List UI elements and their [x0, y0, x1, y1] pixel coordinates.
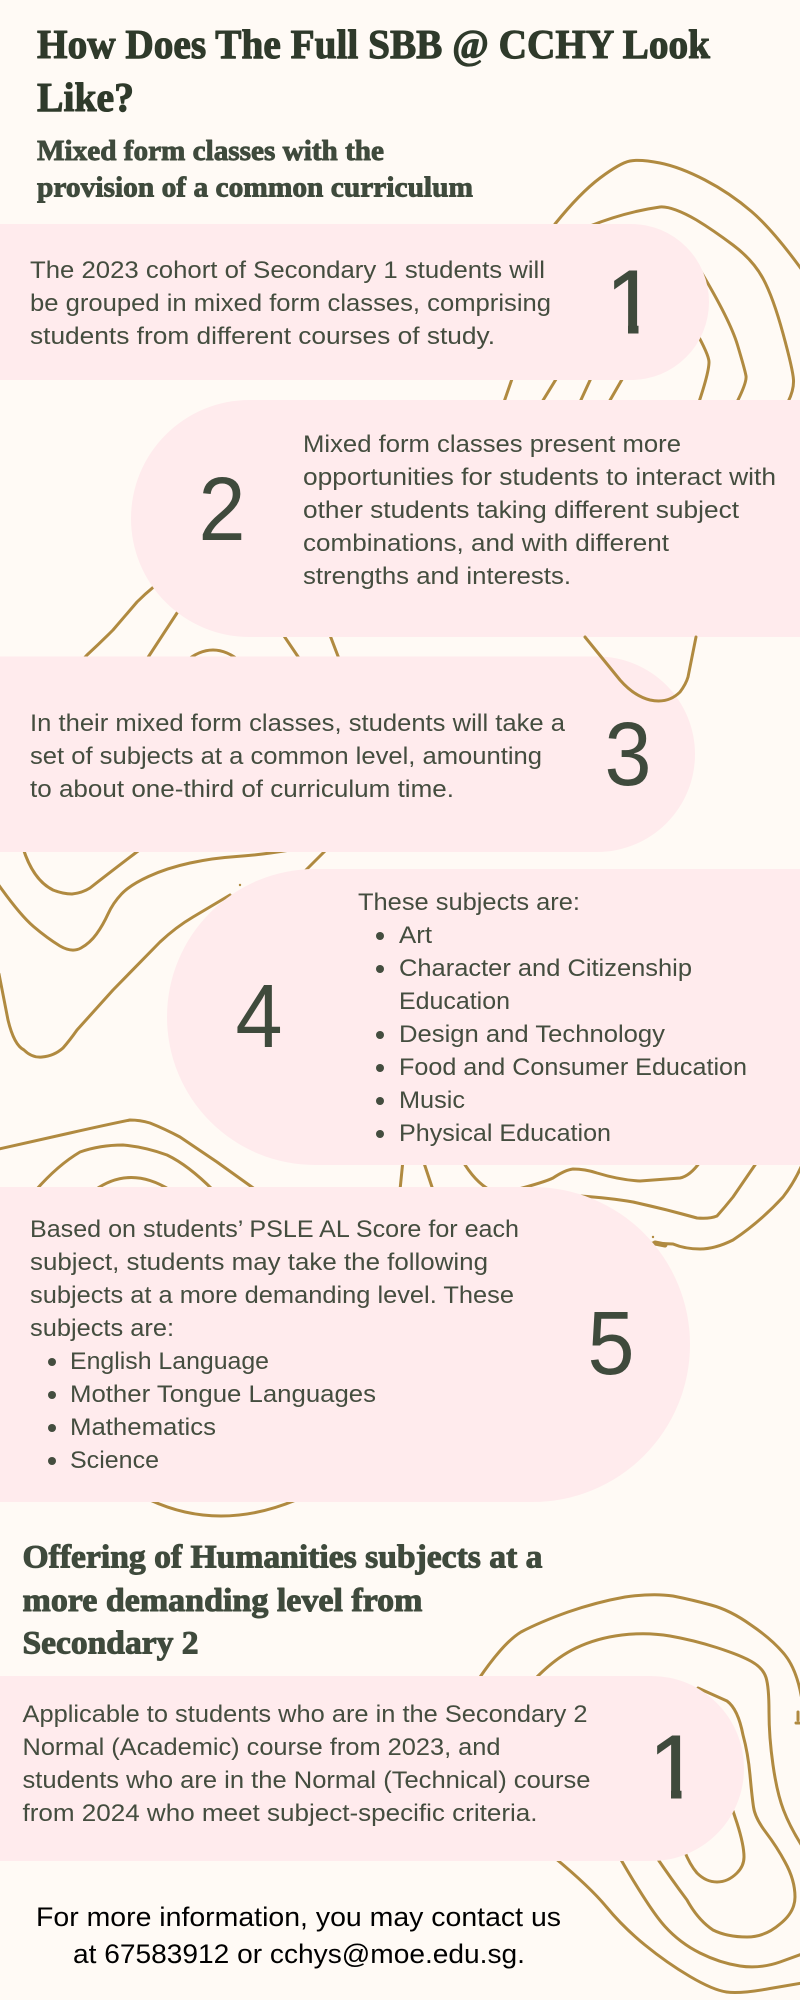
- contact information: [36, 1902, 561, 1969]
- text block 4: [358, 889, 747, 1147]
- contact information: at 67583912 or cchys@moe.edu.sg.: [73, 1939, 525, 1969]
- title: How Does The Full SBB @ CCHY Look: [37, 21, 710, 67]
- subtitle: [37, 135, 473, 204]
- contact information: For more information, you may contact us: [36, 1902, 561, 1932]
- text block 6: Normal (Academic) course from 2023, and: [22, 1734, 500, 1761]
- title: [37, 21, 710, 120]
- text block 6: [22, 1701, 590, 1827]
- text block 2: other students taking different subject: [303, 497, 739, 524]
- panel 2: opportunities to interact: [131, 400, 800, 637]
- heading: humanities subjects: Secondary 2: [22, 1626, 199, 1662]
- panel 6: humanities eligibility: [0, 1676, 744, 1861]
- number 3: 3: [604, 705, 652, 805]
- text block 5: subjects are:: [30, 1315, 174, 1342]
- number 5: 5: [588, 1294, 634, 1394]
- decorative contour lines: top right: [504, 160, 800, 402]
- text block 2: [303, 431, 776, 590]
- text block 2: combinations, and with different: [303, 530, 669, 557]
- heading: humanities subjects: Offering of Humanities subjects at a: [22, 1540, 542, 1576]
- text block 1: [30, 257, 551, 350]
- subtitle: Mixed form classes with the: [37, 135, 384, 167]
- text block 5: English Language: [70, 1348, 269, 1375]
- text block 4: Design and Technology: [399, 1021, 666, 1048]
- text block 2: strengths and interests.: [303, 563, 571, 590]
- contour line over panel 3: [585, 637, 696, 701]
- text block 4: Music: [399, 1087, 465, 1114]
- title: Like?: [37, 74, 134, 120]
- decorative contour lines: lower left: [0, 1120, 296, 1516]
- number 4: 4: [236, 967, 282, 1067]
- number 2: 2: [198, 460, 246, 560]
- text block 3: In their mixed form classes, students will take a: [30, 710, 565, 737]
- text block 4: Character and Citizenship: [399, 955, 692, 982]
- text block 3: [30, 710, 565, 803]
- text block 4: Education: [399, 988, 510, 1015]
- text block 3: set of subjects at a common level, amounting: [30, 743, 542, 770]
- number 1: 1: [606, 253, 656, 353]
- text block 1: students from different courses of study.: [30, 323, 495, 350]
- text block 5: subjects at a more demanding level. These: [30, 1282, 514, 1309]
- text block 6: from 2024 who meet subject-specific criteria.: [22, 1800, 538, 1827]
- text block 6: students who are in the Normal (Technical) course: [22, 1767, 590, 1794]
- decorative contour lines: middle left: [0, 575, 341, 1057]
- text block 5: subject, students may take the following: [30, 1249, 488, 1276]
- decorative contour lines: middle right: [400, 1160, 800, 1249]
- text block 1: The 2023 cohort of Secondary 1 students will: [30, 257, 545, 284]
- text block 4: Physical Education: [399, 1120, 611, 1147]
- text block 3: to about one-third of curriculum time.: [30, 776, 454, 803]
- decorative contour lines: bottom right: [478, 1595, 800, 1993]
- panel 1: mixed form classes: [0, 224, 709, 380]
- panel 3: common level subjects: [0, 637, 696, 852]
- number 1 (humanities): 1: [649, 1718, 699, 1818]
- heading: humanities subjects: more demanding level from: [22, 1583, 422, 1619]
- text block 5: [30, 1216, 519, 1474]
- text block 4: Art: [399, 922, 432, 949]
- text block 4: Food and Consumer Education: [399, 1054, 747, 1081]
- text block 2: Mixed form classes present more: [303, 431, 681, 458]
- panel 5: more demanding level subjects: [0, 1187, 690, 1502]
- subtitle: provision of a common curriculum: [37, 172, 473, 204]
- panel 4: list of common subjects: [167, 869, 800, 1165]
- text block 5: Mother Tongue Languages: [70, 1381, 376, 1408]
- text block 6: Applicable to students who are in the Secondary 2: [22, 1701, 588, 1728]
- text block 5: Based on students’ PSLE AL Score for each: [30, 1216, 519, 1243]
- text block 4: These subjects are:: [358, 889, 580, 916]
- text block 1: be grouped in mixed form classes, comprising: [30, 290, 551, 317]
- text block 5: Mathematics: [70, 1414, 216, 1441]
- heading: humanities subjects: [22, 1540, 542, 1662]
- text block 2: opportunities for students to interact with: [303, 464, 776, 491]
- text block 5: Science: [70, 1447, 159, 1474]
